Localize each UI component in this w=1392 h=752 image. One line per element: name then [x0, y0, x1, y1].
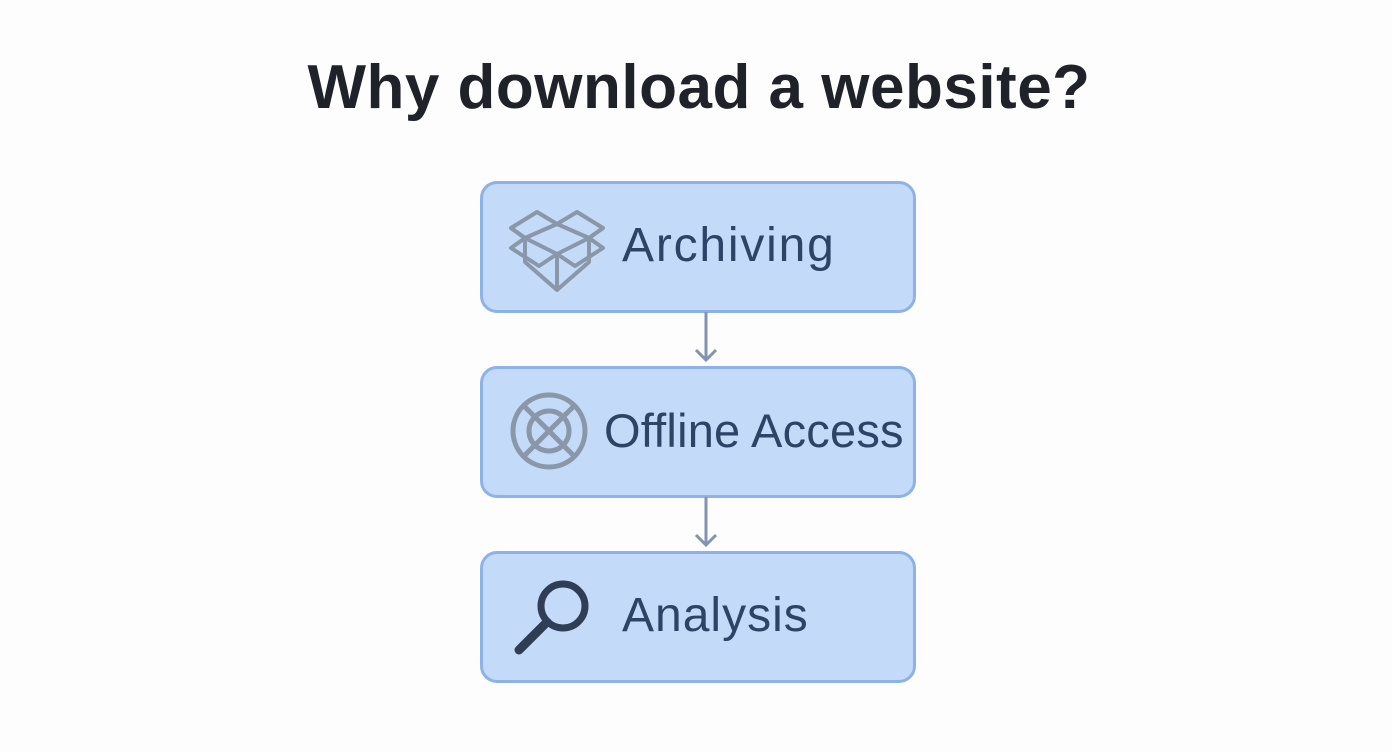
icon: crossed circle	[510, 392, 588, 470]
box: archiving	[480, 181, 916, 313]
label: Analysis	[622, 589, 809, 642]
box: analysis	[480, 551, 916, 683]
arrow 2	[695, 497, 717, 547]
label: Offline Access	[604, 404, 904, 457]
box: offline access	[480, 366, 916, 498]
title: Why download a website?	[307, 53, 1091, 122]
label: Archiving	[622, 219, 836, 272]
icon: magnifier	[514, 580, 588, 654]
arrow 1	[695, 312, 717, 362]
icon: box	[509, 210, 605, 292]
